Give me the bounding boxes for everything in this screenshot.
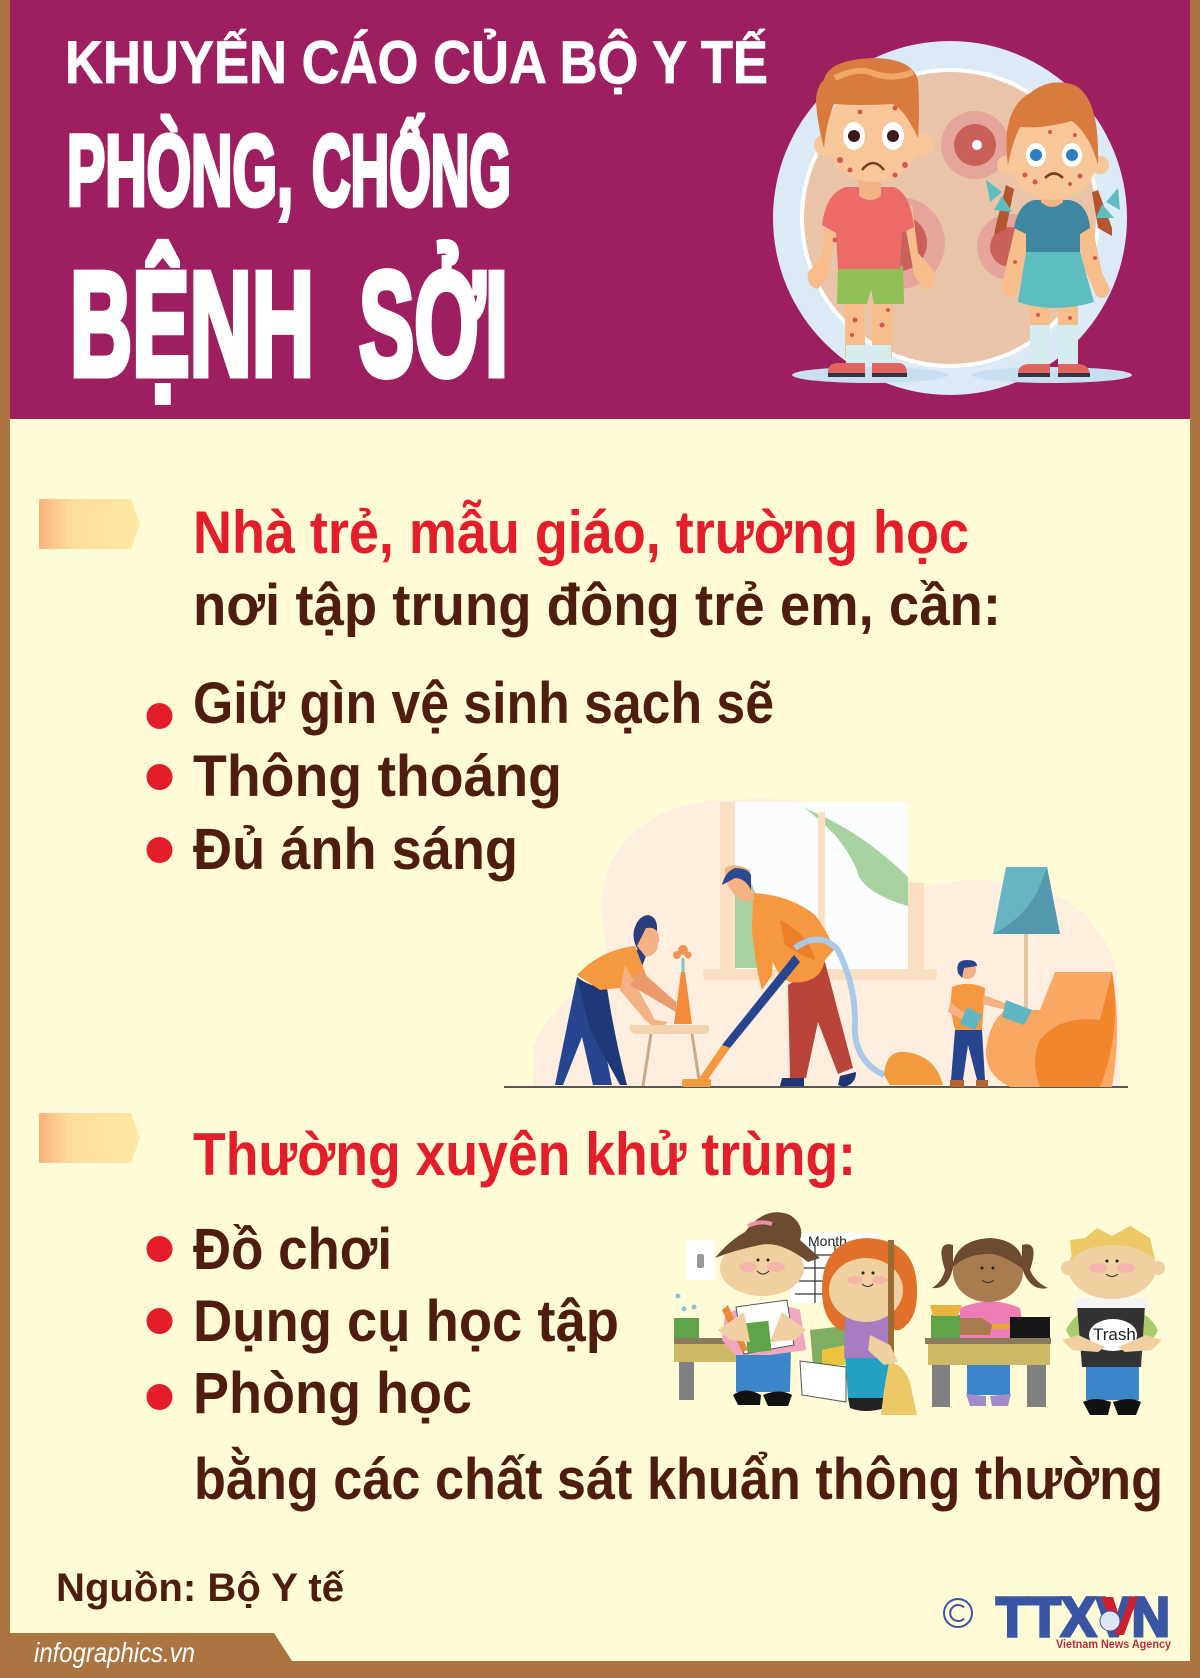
- child four with trash bin: Trash: [1093, 1325, 1136, 1344]
- logo: TTXVN: Vietnam News Agency: [1056, 1637, 1171, 1651]
- section 1 tag: [39, 499, 140, 549]
- illustration: children cleaning classroom: [674, 1212, 1165, 1415]
- illustration: family cleaning: [504, 799, 1128, 1088]
- window: [703, 802, 937, 980]
- girl: [986, 82, 1120, 377]
- floor line: [504, 1086, 1128, 1088]
- heading line 3: BỆNH: [70, 242, 314, 407]
- section 1 bullet list: Đủ ánh sáng: [193, 817, 518, 882]
- section 2 bullet list: [146, 1217, 619, 1426]
- child four with trash bin: [1061, 1226, 1165, 1415]
- section 1 subheading: nơi tập trung đông trẻ em, cần:: [193, 573, 1001, 638]
- armchair: [986, 972, 1117, 1087]
- logo: TTXVN: TTXVN: [996, 1585, 1170, 1648]
- section 2 tag: [39, 1113, 140, 1163]
- lamp: [993, 867, 1060, 1009]
- source line: Nguồn: Bộ Y tế: [56, 1566, 345, 1610]
- boy dusting: [948, 960, 1010, 1087]
- heading line 3: SỞI: [359, 241, 508, 407]
- heading line 2: CHỐNG: [312, 115, 511, 227]
- light switch and calendar: Month: [808, 1233, 847, 1249]
- section 2 bullet list: Dụng cụ học tập: [193, 1289, 619, 1354]
- section 1 heading: Nhà trẻ, mẫu giáo, trường học: [193, 499, 969, 566]
- light switch and calendar: [686, 1233, 879, 1303]
- section 1 bullet list: [146, 671, 774, 882]
- woman dusting: [555, 915, 709, 1086]
- website label: infographics.vn: [34, 1637, 195, 1668]
- child one: [715, 1212, 820, 1406]
- child two with broom: [800, 1238, 917, 1415]
- heading line 1: KHUYẾN CÁO CỦA BỘ Y TẾ: [65, 29, 768, 96]
- header band: [10, 0, 1190, 419]
- illustration: children with measles: [773, 41, 1132, 395]
- man vacuuming: [682, 865, 943, 1087]
- boy: [808, 58, 935, 377]
- section 2 heading: Thường xuyên khử trùng:: [193, 1121, 856, 1188]
- section 1 bullet list: Giữ gìn vệ sinh sạch sẽ: [193, 671, 774, 736]
- child three at desk: [925, 1238, 1051, 1407]
- section 2 bullet list: Phòng học: [193, 1361, 472, 1426]
- left desk: [674, 1294, 738, 1400]
- copyright symbol: [944, 1599, 972, 1627]
- section 1 bullet list: Thông thoáng: [193, 744, 562, 809]
- heading line 2: PHÒNG,: [67, 115, 293, 227]
- section 2 bullet list: Đồ chơi: [193, 1217, 392, 1282]
